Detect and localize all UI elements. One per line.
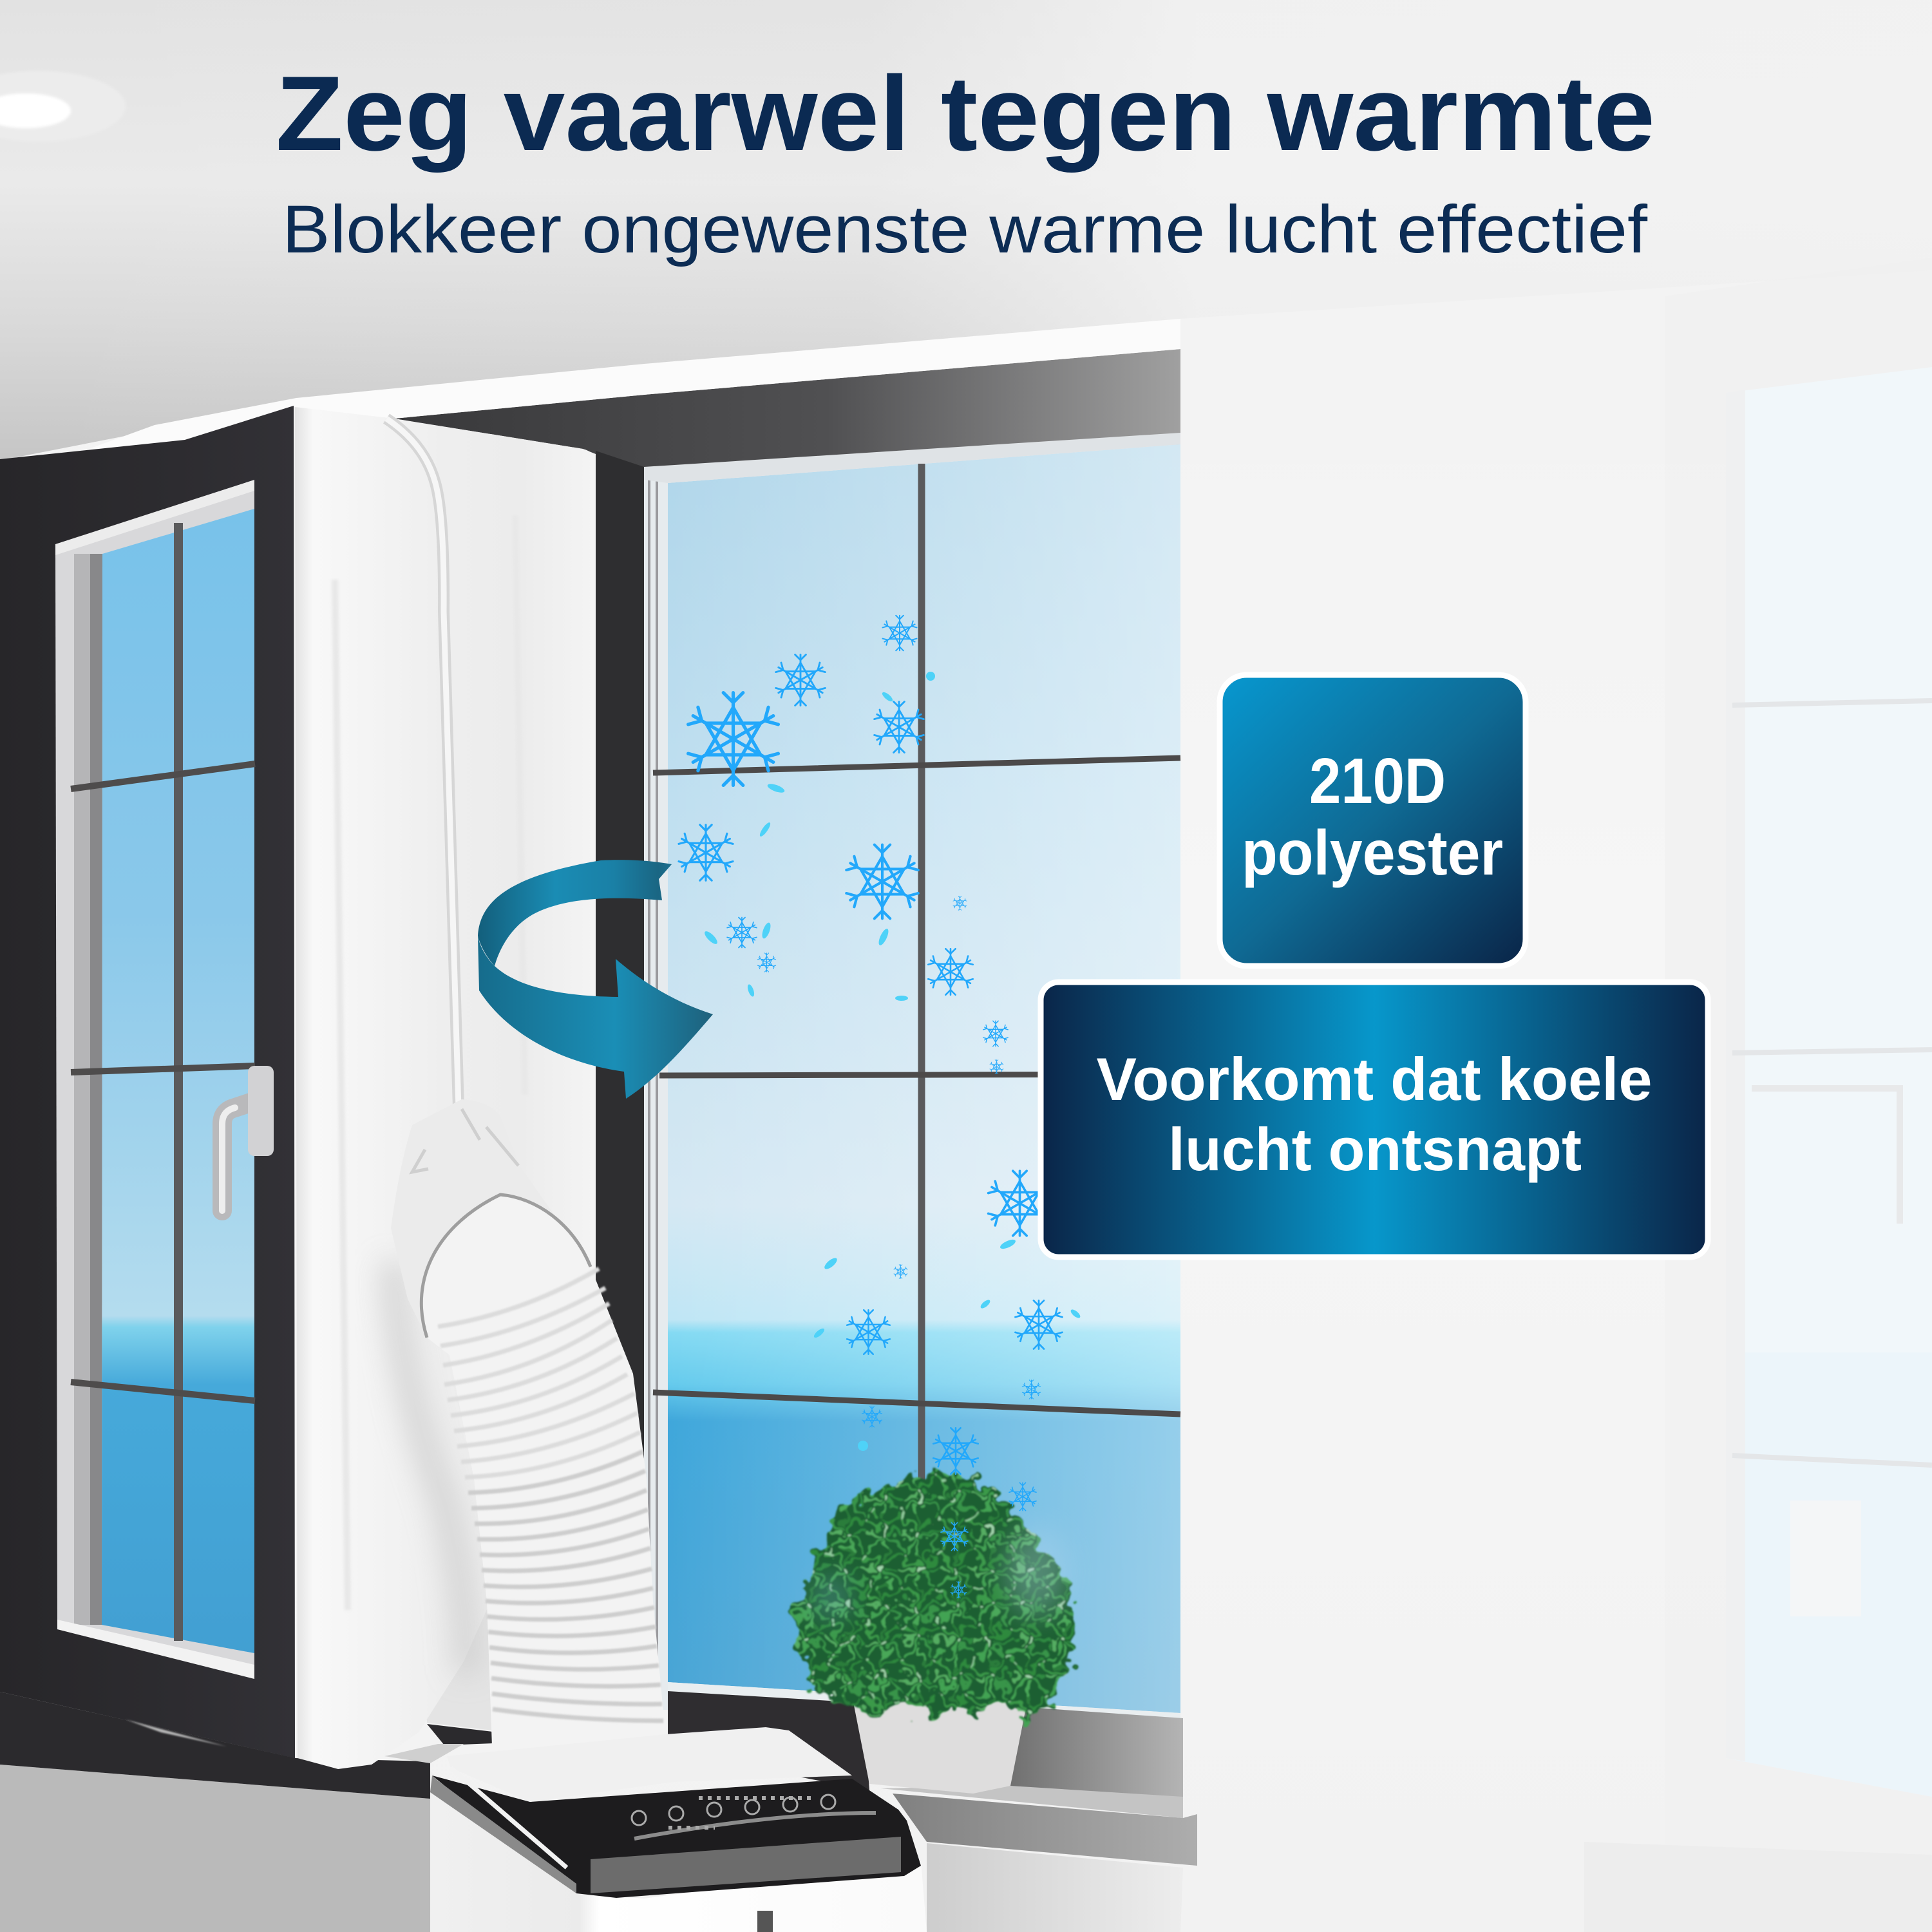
callout text line 1: Voorkomt dat koele xyxy=(1096,1045,1653,1113)
main window frame xyxy=(596,433,1180,1752)
flexible exhaust hose xyxy=(421,1195,665,1765)
unit slot xyxy=(757,1911,773,1932)
snowflakes xyxy=(679,616,1081,1598)
callout: voorkomt dat koele lucht ontsnapt xyxy=(1041,982,1708,1257)
plant pot xyxy=(852,1696,1028,1794)
callout text: polyester: polyester xyxy=(1242,817,1503,888)
fabric window seal xyxy=(295,407,596,1769)
title: Zeg vaarwel tegen warmte xyxy=(276,54,1655,173)
curved airflow arrow xyxy=(478,860,713,1099)
window sill xyxy=(668,1691,1197,1932)
left window sash xyxy=(0,406,295,1758)
callout text: 210D: 210D xyxy=(1309,745,1446,817)
ceiling light xyxy=(0,71,126,142)
plant xyxy=(795,1472,1075,1719)
faded right window xyxy=(1584,258,1932,1932)
control panel buttons xyxy=(632,1795,835,1828)
hose collar xyxy=(391,1099,591,1338)
main window glass xyxy=(668,444,1180,1713)
callout: 210D polyester xyxy=(1220,675,1526,966)
callout text line 2: lucht ontsnapt xyxy=(1168,1115,1582,1183)
white ceiling trim xyxy=(84,319,1180,451)
lower left sill and wall xyxy=(0,1692,430,1932)
window handle xyxy=(222,1066,274,1211)
portable air conditioner xyxy=(430,1727,927,1932)
ceiling xyxy=(0,0,1932,464)
subtitle: Blokkeer ongewenste warme lucht effectief xyxy=(282,192,1648,267)
shadow area behind hose xyxy=(384,1546,509,1763)
main window header xyxy=(394,349,1180,473)
